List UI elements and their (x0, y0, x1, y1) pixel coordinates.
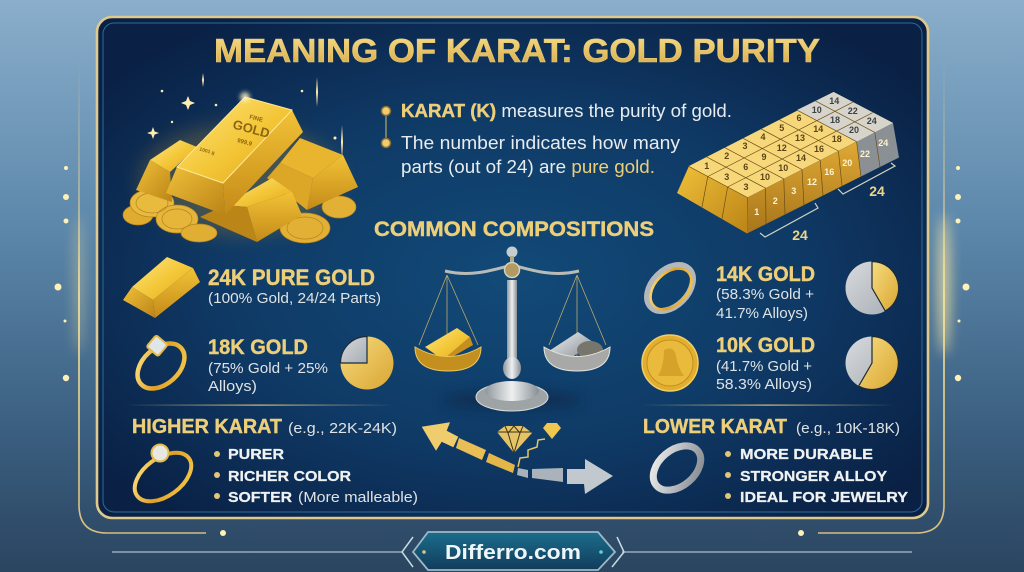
main panel (97, 17, 928, 518)
text: 10K: 10K GOLD (716, 334, 815, 357)
grid numbers: 10 (812, 105, 822, 115)
heading: lower karat (643, 416, 900, 438)
grid numbers: 1 (754, 207, 759, 217)
text: 10K: 58.3% Alloys) (716, 376, 812, 393)
icon: 14K two-tone ring (638, 256, 702, 320)
left pan contents (425, 328, 470, 360)
bottom bar (225, 178, 292, 207)
bar inscription: GOLD (231, 117, 271, 141)
list: lower karat (725, 446, 908, 506)
text: 24K (208, 265, 381, 307)
grid numbers: 10 (778, 163, 788, 173)
grid numbers: 20 (842, 158, 852, 168)
text: 24K: 24K PURE GOLD (208, 265, 375, 290)
text: 18K: Alloys) (208, 378, 257, 395)
grid numbers: 3 (742, 141, 748, 151)
list: higher karat (214, 446, 418, 506)
outer frame line (79, 60, 944, 533)
icon: 24K gold bar (123, 257, 200, 318)
bar inscription: 999.9 (236, 138, 253, 148)
footer badge (112, 532, 912, 570)
illustration: 24-part gold bar grid (677, 92, 899, 243)
grid numbers: 3 (724, 172, 729, 182)
grid numbers: 2 (724, 151, 729, 161)
sparkles (147, 73, 343, 159)
list: higher karat: SOFTER (228, 489, 292, 506)
heading: lower karat: LOWER KARAT (643, 416, 787, 438)
grid numbers: 12 (807, 177, 817, 187)
grid numbers: 14 (796, 153, 806, 163)
list: higher karat: PURER (228, 446, 284, 463)
grid numbers: 16 (814, 144, 824, 154)
grid numbers: 20 (849, 125, 859, 135)
grid numbers: 5 (779, 123, 784, 133)
arrows: karat trade-off (422, 422, 613, 494)
text: 14K: (58.3% Gold + (716, 286, 814, 303)
grid numbers: 16 (824, 167, 834, 177)
definition text (401, 101, 732, 177)
bar inscription: FINE (249, 115, 263, 124)
left glow (74, 215, 84, 355)
definition text: parts (out of 24) are pure gold. (401, 157, 655, 177)
pie chart: 18K (340, 336, 394, 390)
text: 10K (716, 334, 815, 393)
text: 14K (716, 263, 815, 322)
list: lower karat: STRONGER ALLOY (740, 468, 887, 485)
text: 24K: (100% Gold, 24/24 Parts) (208, 290, 381, 307)
illustration: balance scale (415, 246, 610, 411)
background sparkle dots (54, 166, 970, 536)
grid numbers: 1 (704, 161, 709, 171)
icon: 10K gold coin (642, 335, 698, 391)
definition text: The number indicates how many (401, 133, 680, 153)
illustration: gold bar pile with coins (123, 73, 358, 243)
list: higher karat: (More malleable) (298, 489, 418, 506)
grid numbers: 14 (829, 96, 839, 106)
grid numbers: 10 (760, 172, 770, 182)
grid numbers: 6 (743, 162, 748, 172)
heading: common compositions: COMMON COMPOSITIONS (374, 218, 654, 241)
list: lower karat: IDEAL FOR JEWELRY (740, 489, 908, 506)
text: 18K: (75% Gold + 25% (208, 360, 328, 377)
text: 10K: (41.7% Gold + (716, 358, 812, 375)
pie chart: 10K (846, 336, 898, 390)
grid numbers (704, 96, 888, 217)
icon: silver ring (645, 437, 709, 499)
grid numbers: 22 (860, 149, 870, 159)
grid numbers: 22 (848, 106, 858, 116)
grid numbers: 4 (760, 132, 766, 142)
definition bullets (382, 106, 390, 148)
grid numbers: 9 (761, 152, 767, 162)
heading: higher karat: (e.g., 22K-24K) (288, 420, 397, 437)
heading: lower karat: (e.g., 10K-18K) (796, 420, 900, 437)
post (507, 280, 517, 360)
list: lower karat: MORE DURABLE (740, 446, 873, 463)
icon: 18K diamond ring (129, 335, 193, 397)
grid numbers: 14 (813, 124, 823, 134)
grid numbers: 3 (743, 182, 749, 192)
base (503, 357, 521, 379)
chains (419, 275, 606, 360)
icon: small diamond (543, 423, 561, 439)
grid numbers: 12 (777, 143, 787, 153)
grid numbers: 6 (796, 113, 802, 123)
footer badge: Differro.com (445, 542, 581, 564)
beam (445, 265, 579, 273)
grid numbers: 13 (795, 133, 805, 143)
illustration: 24-part gold bar grid: 24 (869, 183, 885, 199)
right back bar (280, 138, 343, 178)
bar inscription: 1001 g (199, 147, 215, 157)
coins (123, 189, 356, 243)
title: MEANING OF KARAT: GOLD PURITY (214, 32, 820, 69)
left pan (415, 347, 481, 371)
pie chart: 14K (846, 261, 899, 314)
right pan contents (549, 332, 593, 361)
text: 18K (208, 336, 328, 395)
text: 14K: 14K GOLD (716, 263, 815, 286)
text: 18K: 18K GOLD (208, 336, 308, 359)
left back bar (150, 140, 197, 172)
text: 14K: 41.7% Alloys) (716, 305, 808, 322)
grid numbers: 24 (867, 116, 877, 126)
grid numbers: 2 (773, 196, 778, 206)
grid numbers: 18 (832, 134, 842, 144)
illustration: 24-part gold bar grid: 24 (792, 227, 808, 243)
heading: higher karat (132, 416, 397, 438)
main bar (177, 97, 292, 183)
icon: higher karat ring (126, 443, 200, 511)
grid brackets (760, 163, 895, 237)
icon: large diamond (497, 426, 532, 453)
list: higher karat: RICHER COLOR (228, 468, 351, 485)
heading: higher karat: HIGHER KARAT (132, 416, 282, 438)
bar inscription (199, 104, 273, 169)
grid numbers: 3 (791, 186, 796, 196)
section dividers (125, 404, 395, 406)
right pan (544, 347, 610, 371)
grid numbers: 24 (878, 138, 888, 148)
definition text: KARAT (K) measures the purity of gold. (401, 101, 732, 121)
right glow (938, 215, 950, 355)
grid numbers: 18 (830, 115, 840, 125)
